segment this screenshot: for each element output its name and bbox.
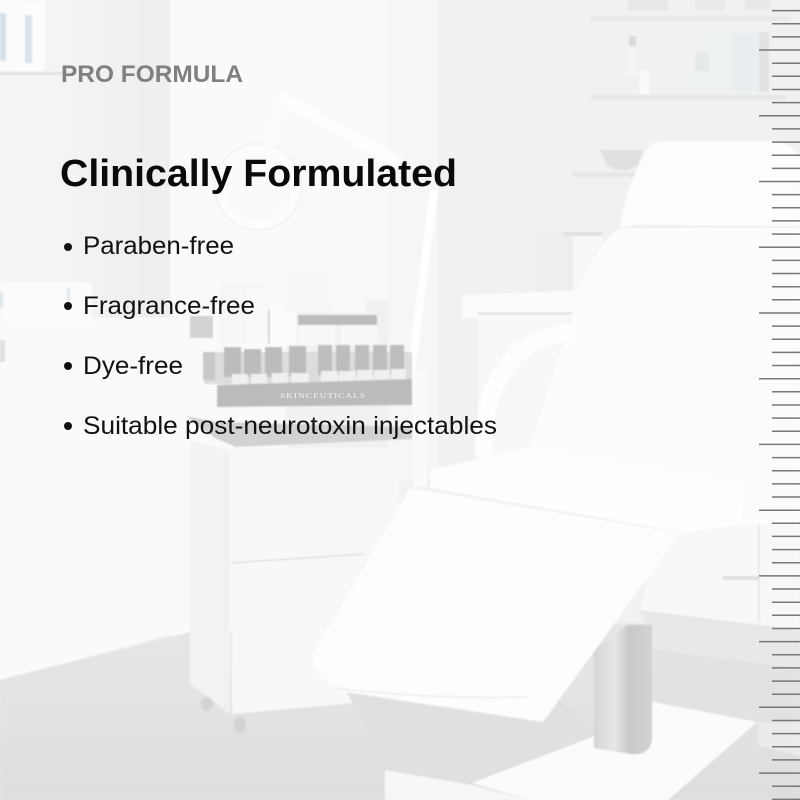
lower cabinet right — [640, 525, 800, 722]
lower shelf — [186, 416, 412, 447]
top left shelf with bottles — [0, 0, 75, 75]
bullet: dye-free: Dye-free — [83, 352, 183, 380]
base plate — [385, 702, 800, 800]
chair — [312, 141, 800, 800]
shelves top right with products — [590, 0, 790, 100]
chair back — [530, 228, 800, 525]
bullet: paraben-free: Paraben-free — [83, 232, 234, 260]
leg rest — [312, 488, 680, 722]
bullet: post-neurotoxin: Suitable post-neurotoxin injectables — [83, 412, 497, 440]
serum bottle row — [203, 345, 412, 384]
seat — [430, 447, 745, 532]
title: Clinically Formulated — [60, 153, 457, 195]
ruler scale on right edge — [759, 11, 800, 799]
floor — [0, 620, 800, 800]
tray front — [217, 379, 412, 407]
armrest — [483, 332, 568, 450]
mid left bottles — [0, 282, 92, 362]
hydraulic column — [594, 625, 652, 754]
left lower cabinet — [0, 318, 172, 680]
floor shadow under chair — [345, 690, 593, 784]
cart — [186, 268, 412, 733]
eyebrow label: PRO FORMULA — [61, 61, 243, 88]
counter behind chair — [462, 290, 582, 474]
bullet list — [64, 232, 497, 440]
glass jars — [536, 232, 603, 292]
headrest — [620, 141, 800, 228]
bowl and lower shelf — [572, 150, 643, 177]
cart products — [190, 268, 377, 345]
cart brand label: SKINCEUTICALS — [280, 391, 366, 400]
bullet: fragrance-free: Fragrance-free — [83, 292, 255, 320]
magnifying lamp — [215, 97, 434, 487]
